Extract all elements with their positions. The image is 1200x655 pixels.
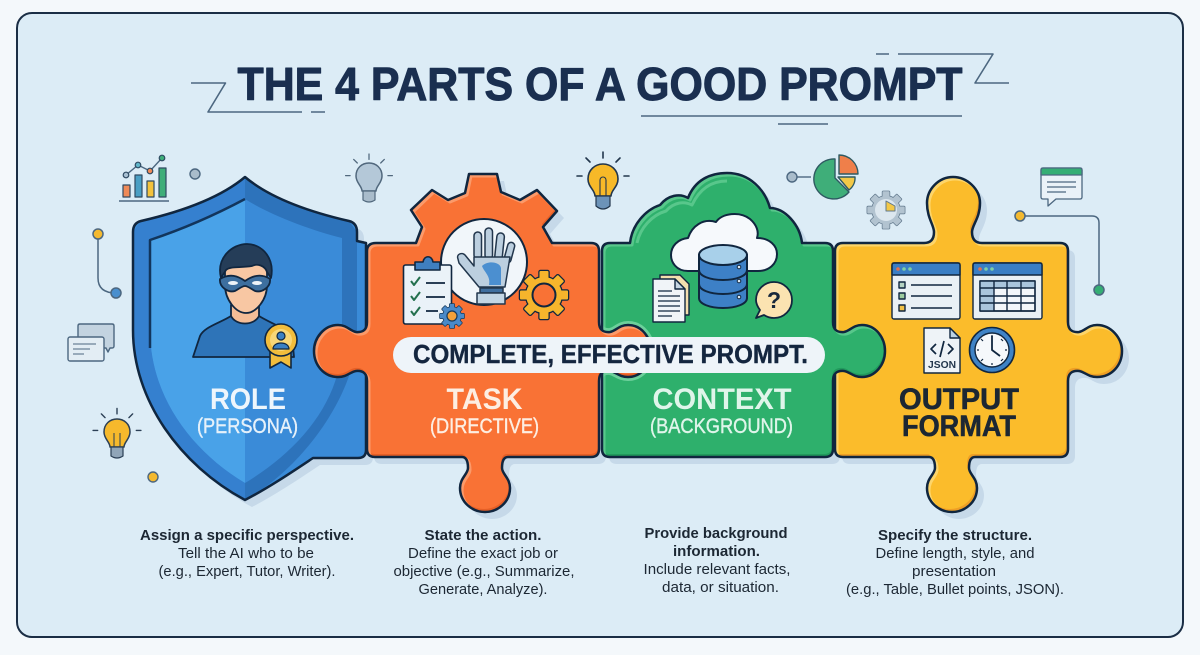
icon: small blue gear bbox=[440, 304, 464, 328]
panel: piece shadows bbox=[140, 180, 1129, 519]
text block: context description: data, or situation. bbox=[662, 580, 779, 596]
icon: right connector line bbox=[1015, 211, 1104, 295]
text block: output description bbox=[846, 528, 1064, 598]
icon: json file bbox=[924, 328, 960, 373]
text block: task description: Define the exact job or bbox=[408, 546, 558, 562]
icon: masked person bbox=[193, 244, 294, 357]
heading: output format: FORMAT bbox=[902, 410, 1016, 443]
subheading: background: (BACKGROUND) bbox=[650, 415, 793, 438]
text block: context description: information. bbox=[673, 544, 760, 560]
icon: database bbox=[699, 245, 747, 308]
panel: task puzzle piece bbox=[313, 171, 653, 514]
text block: context description bbox=[644, 526, 790, 596]
icon: checklist clipboard bbox=[404, 257, 452, 324]
icon: white cloud bbox=[671, 214, 777, 271]
text block: task description: objective (e.g., Summarize, bbox=[394, 564, 574, 580]
text block: task description: Generate, Analyze). bbox=[418, 582, 548, 598]
icon: yellow gear bbox=[520, 271, 568, 319]
icon: question bubble bbox=[756, 282, 792, 318]
heading: context: CONTEXT bbox=[652, 383, 792, 416]
text block: role description bbox=[140, 528, 354, 580]
panel: context puzzle piece bbox=[599, 170, 887, 459]
icon: message box bbox=[1041, 168, 1082, 206]
icon: json file: JSON bbox=[928, 360, 956, 371]
icon: clock bbox=[970, 328, 1014, 372]
heading: output format bbox=[899, 383, 1019, 443]
icon: pie chart bbox=[787, 155, 858, 199]
icon: left connector line bbox=[93, 229, 121, 298]
heading: role: ROLE bbox=[210, 383, 286, 416]
icon: grey dot bbox=[190, 169, 200, 179]
icon: gear clock bbox=[867, 191, 905, 229]
text block: context description: Include relevant facts, bbox=[644, 562, 790, 578]
text block: role description: Assign a specific perspective. bbox=[140, 528, 354, 544]
icon: bullet list window bbox=[892, 263, 960, 319]
text block: role description: Tell the AI who to be bbox=[178, 546, 314, 562]
icon: yellow light bulb left bbox=[93, 408, 141, 458]
title: THE 4 PARTS OF A GOOD PROMPT bbox=[238, 58, 962, 110]
icon: documents bbox=[653, 275, 689, 322]
text block: output description: Specify the structure. bbox=[878, 528, 1032, 544]
icon: yellow light bulb top bbox=[577, 152, 629, 209]
icon: bar chart decoration bbox=[119, 155, 169, 201]
icon: grey light bulb bbox=[346, 154, 392, 202]
text block: output description: (e.g., Table, Bullet points, JSON). bbox=[846, 582, 1064, 598]
panel: role shield bbox=[133, 177, 366, 500]
heading: output format: OUTPUT bbox=[899, 383, 1019, 416]
subheading: directive: (DIRECTIVE) bbox=[430, 415, 539, 438]
subheading: persona: (PERSONA) bbox=[197, 415, 298, 438]
text block: role description: (e.g., Expert, Tutor, Writer). bbox=[158, 564, 336, 580]
text block: output description: Define length, style, and bbox=[876, 546, 1034, 562]
icon: table window bbox=[973, 263, 1042, 319]
panel: output format puzzle piece bbox=[833, 174, 1124, 514]
callout: complete effective prompt banner: COMPLETE, EFFECTIVE PROMPT. bbox=[413, 339, 808, 369]
icon: question bubble: ? bbox=[767, 287, 781, 313]
icon: yellow dot bbox=[148, 472, 158, 482]
icon: robot hand circle bbox=[441, 219, 527, 305]
text block: task description bbox=[394, 528, 574, 598]
icon: award badge bbox=[265, 324, 297, 368]
title bbox=[191, 54, 1009, 124]
heading: task: TASK bbox=[446, 383, 523, 416]
text block: context description: Provide background bbox=[644, 526, 788, 542]
text block: task description: State the action. bbox=[424, 528, 542, 544]
icon: chat bubbles bbox=[68, 324, 114, 361]
text block: output description: presentation bbox=[912, 564, 996, 580]
